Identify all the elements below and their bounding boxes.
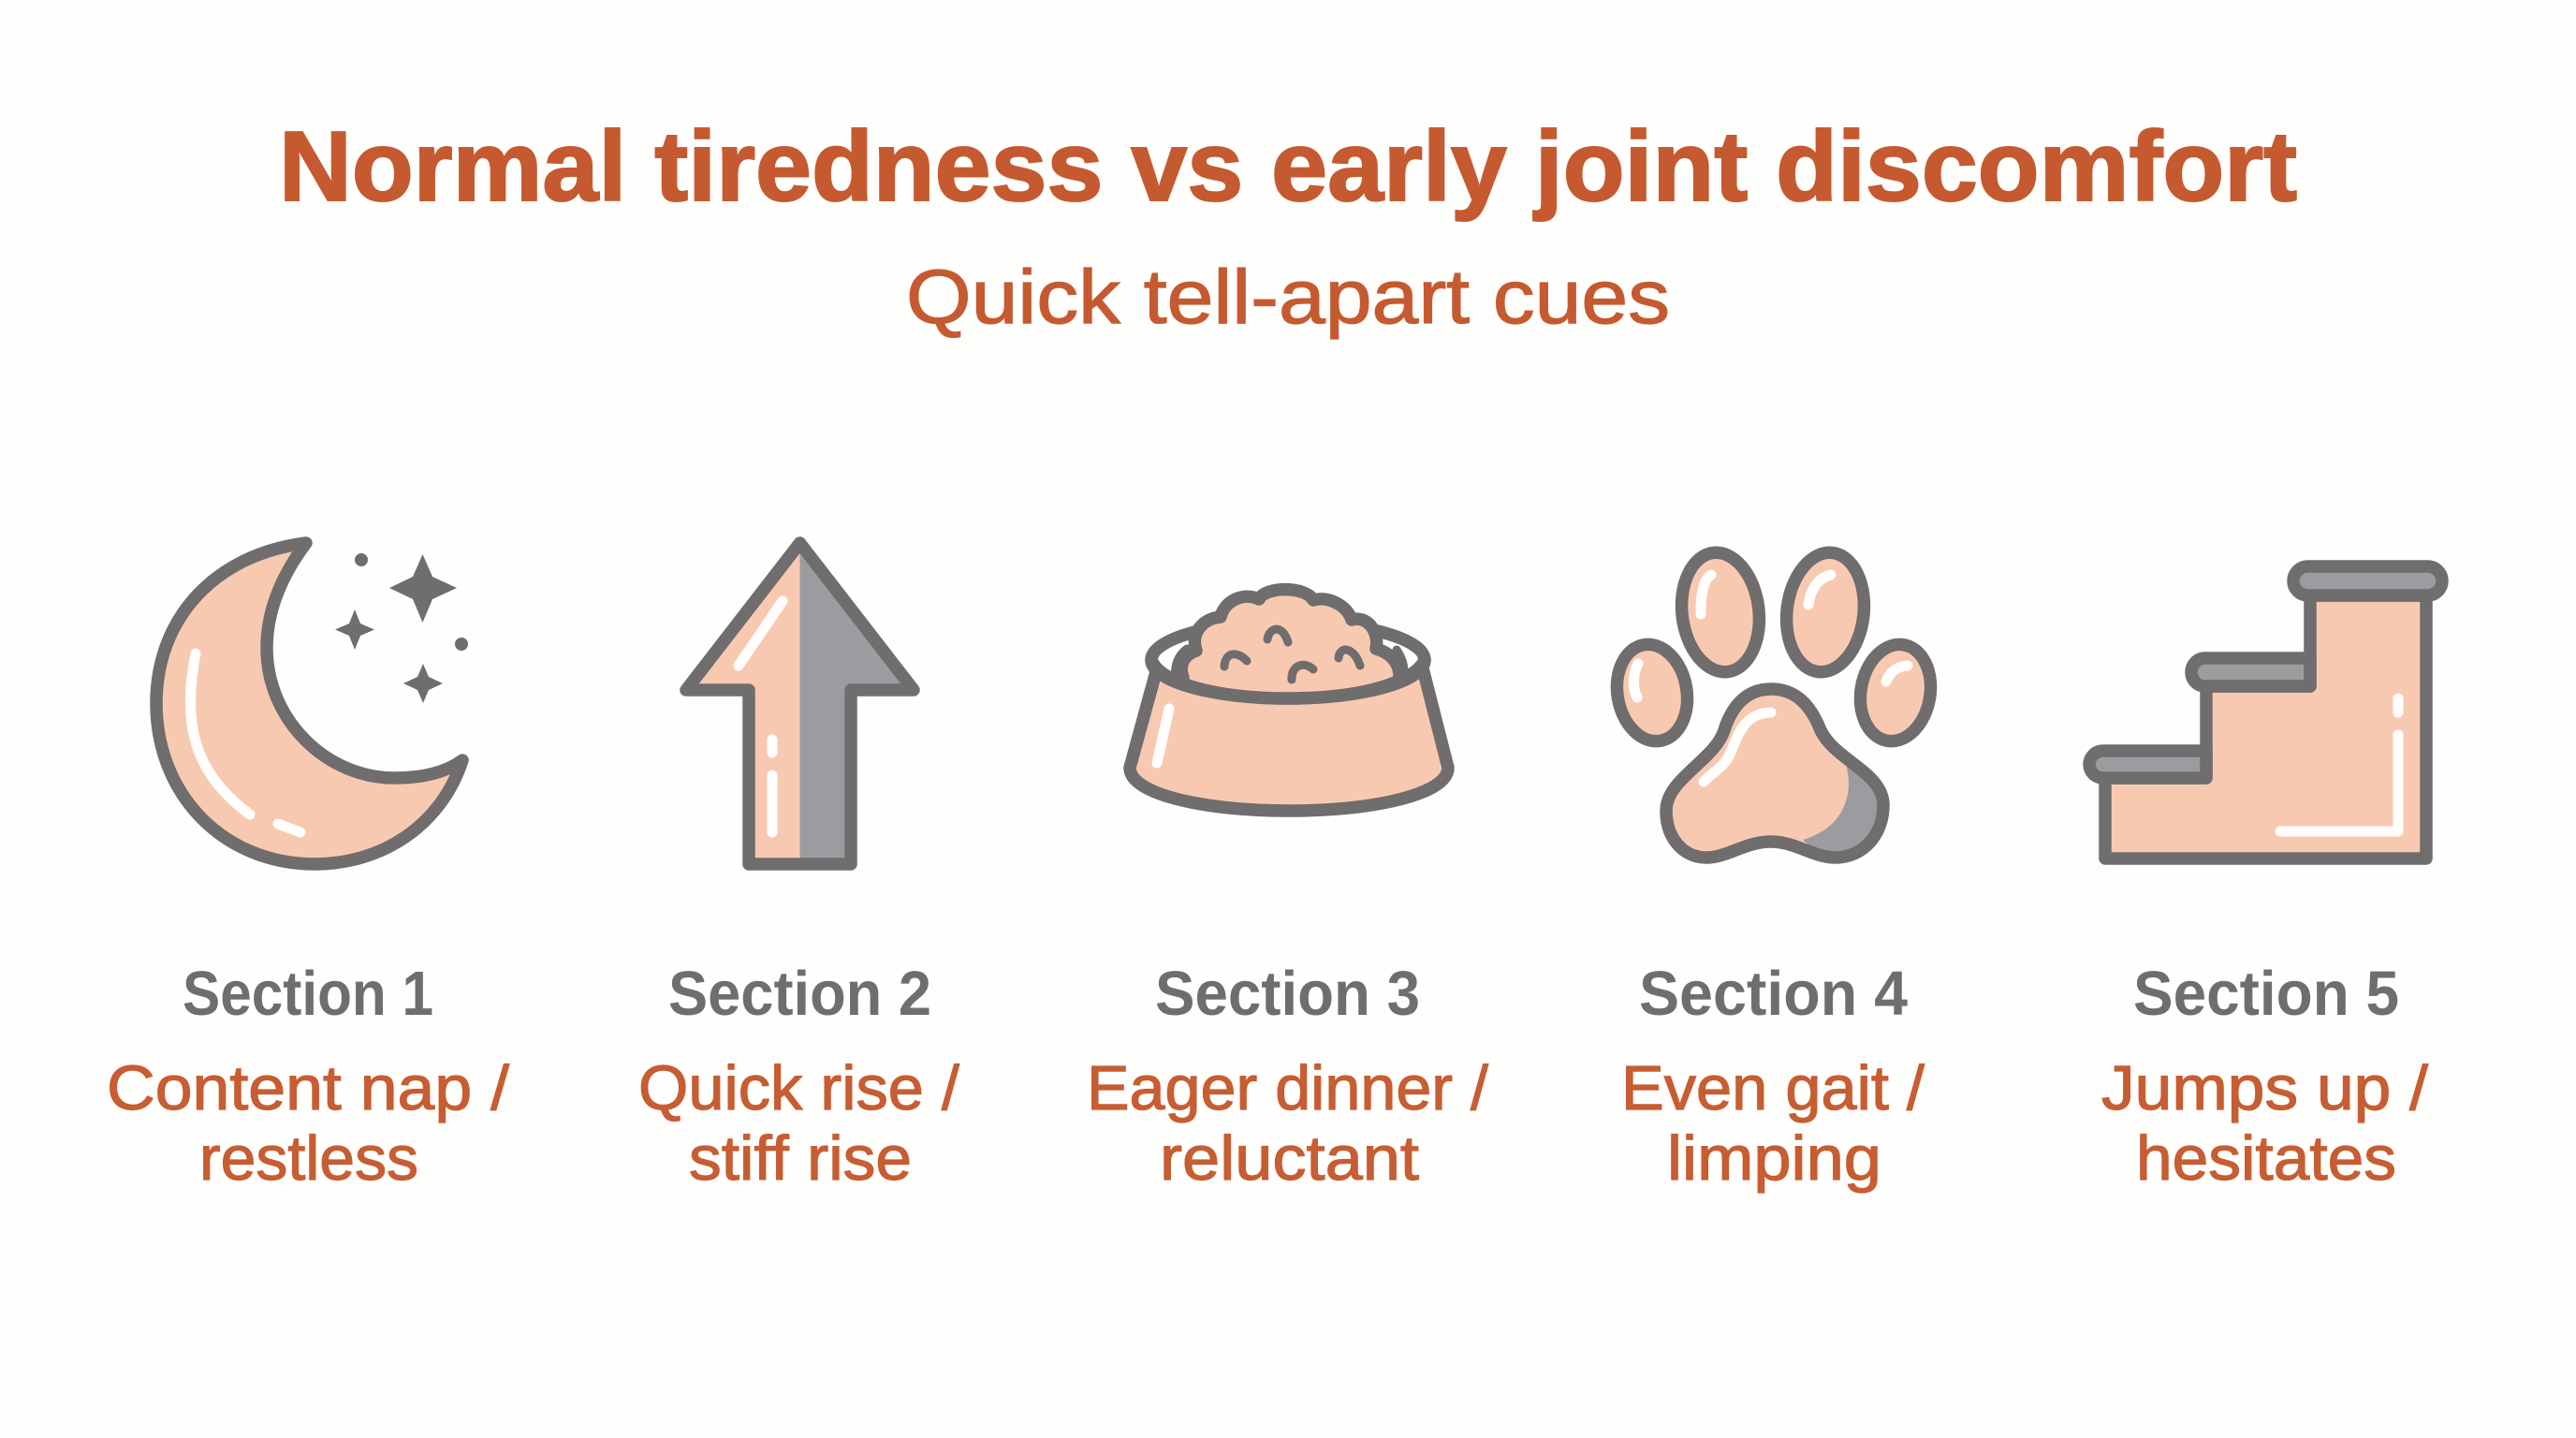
heading: section 2: Section 2 bbox=[668, 959, 931, 1029]
heading: section 5: Section 5 bbox=[2133, 959, 2399, 1029]
caption: section 1: restless bbox=[199, 1123, 418, 1194]
caption: section 1: Content nap / bbox=[107, 1053, 509, 1123]
caption: section 5: Jumps up / bbox=[2101, 1053, 2428, 1123]
section 4: even gait bbox=[1610, 548, 1938, 1194]
caption: section 3: Eager dinner / bbox=[1087, 1053, 1488, 1123]
caption: section 4: limping bbox=[1667, 1123, 1881, 1194]
subtitle: Quick tell-apart cues bbox=[906, 255, 1670, 340]
caption: section 2: stiff rise bbox=[689, 1123, 912, 1194]
caption: section 4: Even gait / bbox=[1621, 1053, 1925, 1123]
icon: paw print bbox=[1610, 548, 1938, 858]
icon: up arrow bbox=[686, 543, 914, 864]
heading: section 4: Section 4 bbox=[1639, 959, 1908, 1029]
caption: section 5: hesitates bbox=[2136, 1123, 2396, 1194]
section 5: jumps up bbox=[2089, 566, 2442, 1194]
caption: section 2 bbox=[638, 1053, 959, 1194]
section 3: eager dinner bbox=[1087, 590, 1488, 1194]
icon: stairs bbox=[2089, 566, 2442, 858]
icon: food bowl bbox=[1130, 590, 1448, 811]
caption: section 5 bbox=[2101, 1053, 2428, 1194]
section 1: content nap bbox=[107, 543, 509, 1194]
caption: section 3: reluctant bbox=[1160, 1123, 1419, 1194]
caption: section 2: Quick rise / bbox=[638, 1053, 959, 1123]
title: Normal tiredness vs early joint discomfort bbox=[279, 111, 2297, 222]
section 2: quick rise bbox=[638, 543, 959, 1194]
caption: section 1 bbox=[107, 1053, 509, 1194]
caption: section 4 bbox=[1621, 1053, 1925, 1194]
heading: section 1: Section 1 bbox=[183, 959, 433, 1029]
icon: crescent moon and stars bbox=[156, 543, 468, 864]
heading: section 3: Section 3 bbox=[1155, 959, 1420, 1029]
caption: section 3 bbox=[1087, 1053, 1488, 1194]
